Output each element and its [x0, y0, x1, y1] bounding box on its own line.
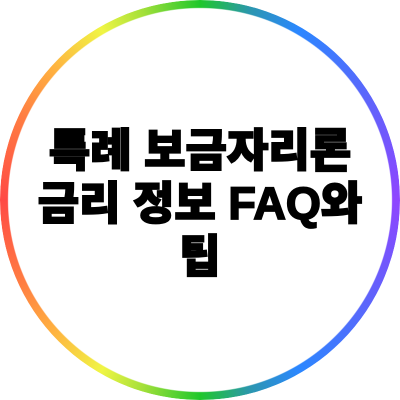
title: 금리 정보 FAQ와 — [38, 178, 362, 229]
title — [38, 125, 362, 282]
title: 팁 — [179, 231, 221, 282]
title: 특례 보금자리론 — [49, 125, 351, 176]
